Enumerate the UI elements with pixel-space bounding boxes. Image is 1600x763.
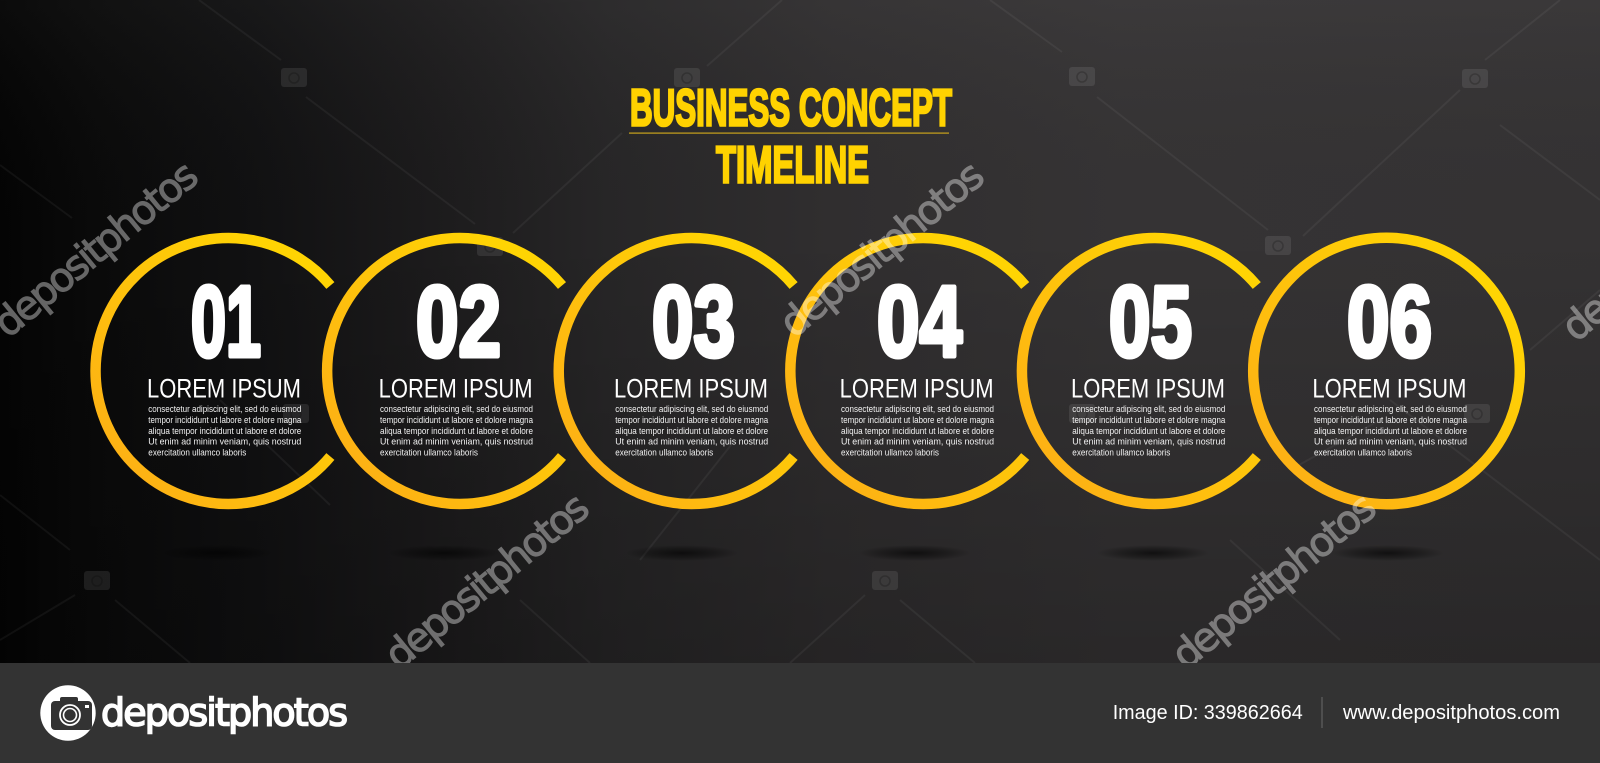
step 04: tempor incididunt ut labore et dolore magna	[841, 415, 995, 426]
step 01: tempor incididunt ut labore et dolore magna	[148, 415, 302, 426]
website url: www.depositphotos.com	[1342, 702, 1560, 724]
step 06	[1253, 238, 1520, 504]
title	[629, 80, 952, 194]
step 01: aliqua tempor incididunt ut labore et dolore	[148, 426, 301, 437]
step 02: 02	[416, 266, 501, 378]
step 04: LOREM IPSUM	[840, 374, 994, 404]
step 05: Ut enim ad minim veniam, quis nostrud	[1072, 436, 1225, 448]
step 05: consectetur adipiscing elit, sed do eiusmod	[1072, 404, 1225, 415]
step 06: 06	[1347, 266, 1432, 378]
step 03: aliqua tempor incididunt ut labore et dolore	[615, 426, 768, 437]
step 01: exercitation ullamco laboris	[148, 448, 246, 458]
step 03: exercitation ullamco laboris	[615, 448, 713, 458]
step 02: Ut enim ad minim veniam, quis nostrud	[380, 436, 533, 448]
step 01	[96, 238, 330, 504]
step 05: exercitation ullamco laboris	[1072, 448, 1170, 458]
step 04: consectetur adipiscing elit, sed do eiusmod	[841, 404, 994, 415]
footer logo wordmark: depositphotos	[101, 690, 348, 734]
step 06: aliqua tempor incididunt ut labore et dolore	[1314, 426, 1467, 437]
step 05: 05	[1109, 266, 1192, 378]
step 03: Ut enim ad minim veniam, quis nostrud	[615, 436, 768, 448]
step 02: aliqua tempor incididunt ut labore et dolore	[380, 426, 533, 437]
step 06: LOREM IPSUM	[1312, 374, 1466, 404]
step 03: tempor incididunt ut labore et dolore magna	[615, 415, 769, 426]
diagonal watermarks: depositphotos	[376, 484, 598, 679]
step 03	[559, 238, 794, 504]
step 02: exercitation ullamco laboris	[380, 448, 478, 458]
step 06: consectetur adipiscing elit, sed do eiusmod	[1314, 404, 1467, 415]
step 02: LOREM IPSUM	[379, 374, 533, 404]
step 04: Ut enim ad minim veniam, quis nostrud	[841, 436, 994, 448]
step 02: consectetur adipiscing elit, sed do eiusmod	[380, 404, 533, 415]
footer logo icon: camera	[40, 685, 96, 741]
step 02	[327, 238, 562, 504]
title: BUSINESS CONCEPT	[630, 80, 952, 138]
step 01: 01	[191, 266, 261, 378]
step 03: 03	[652, 266, 735, 378]
footer divider	[1322, 697, 1323, 728]
image id: Image ID: 339862664	[1113, 702, 1303, 724]
diagonal watermarks	[0, 152, 1600, 679]
step 05: aliqua tempor incididunt ut labore et dolore	[1072, 426, 1225, 437]
floor shadows	[161, 545, 1444, 561]
faint camera watermark icons	[84, 67, 1490, 590]
step 05	[1022, 238, 1257, 504]
step 04	[790, 238, 1025, 504]
diagonal watermarks: depositphotos	[771, 152, 993, 347]
step 03: consectetur adipiscing elit, sed do eiusmod	[615, 404, 768, 415]
title: TIMELINE	[716, 136, 869, 194]
footer bar	[0, 663, 1600, 763]
step 04: 04	[877, 266, 962, 378]
step 05: tempor incididunt ut labore et dolore magna	[1072, 415, 1226, 426]
step 05: LOREM IPSUM	[1071, 374, 1225, 404]
step 06: tempor incididunt ut labore et dolore magna	[1314, 415, 1468, 426]
step 03: LOREM IPSUM	[614, 374, 768, 404]
step 06: exercitation ullamco laboris	[1314, 448, 1412, 458]
step 01: Ut enim ad minim veniam, quis nostrud	[148, 436, 301, 448]
step 06: Ut enim ad minim veniam, quis nostrud	[1314, 436, 1467, 448]
step 04: aliqua tempor incididunt ut labore et dolore	[841, 426, 994, 437]
step 02: tempor incididunt ut labore et dolore magna	[380, 415, 534, 426]
step 04: exercitation ullamco laboris	[841, 448, 939, 458]
diagonal watermarks: depositphotos	[1163, 484, 1385, 679]
step 01: LOREM IPSUM	[147, 374, 301, 404]
step 01: consectetur adipiscing elit, sed do eiusmod	[148, 404, 301, 415]
